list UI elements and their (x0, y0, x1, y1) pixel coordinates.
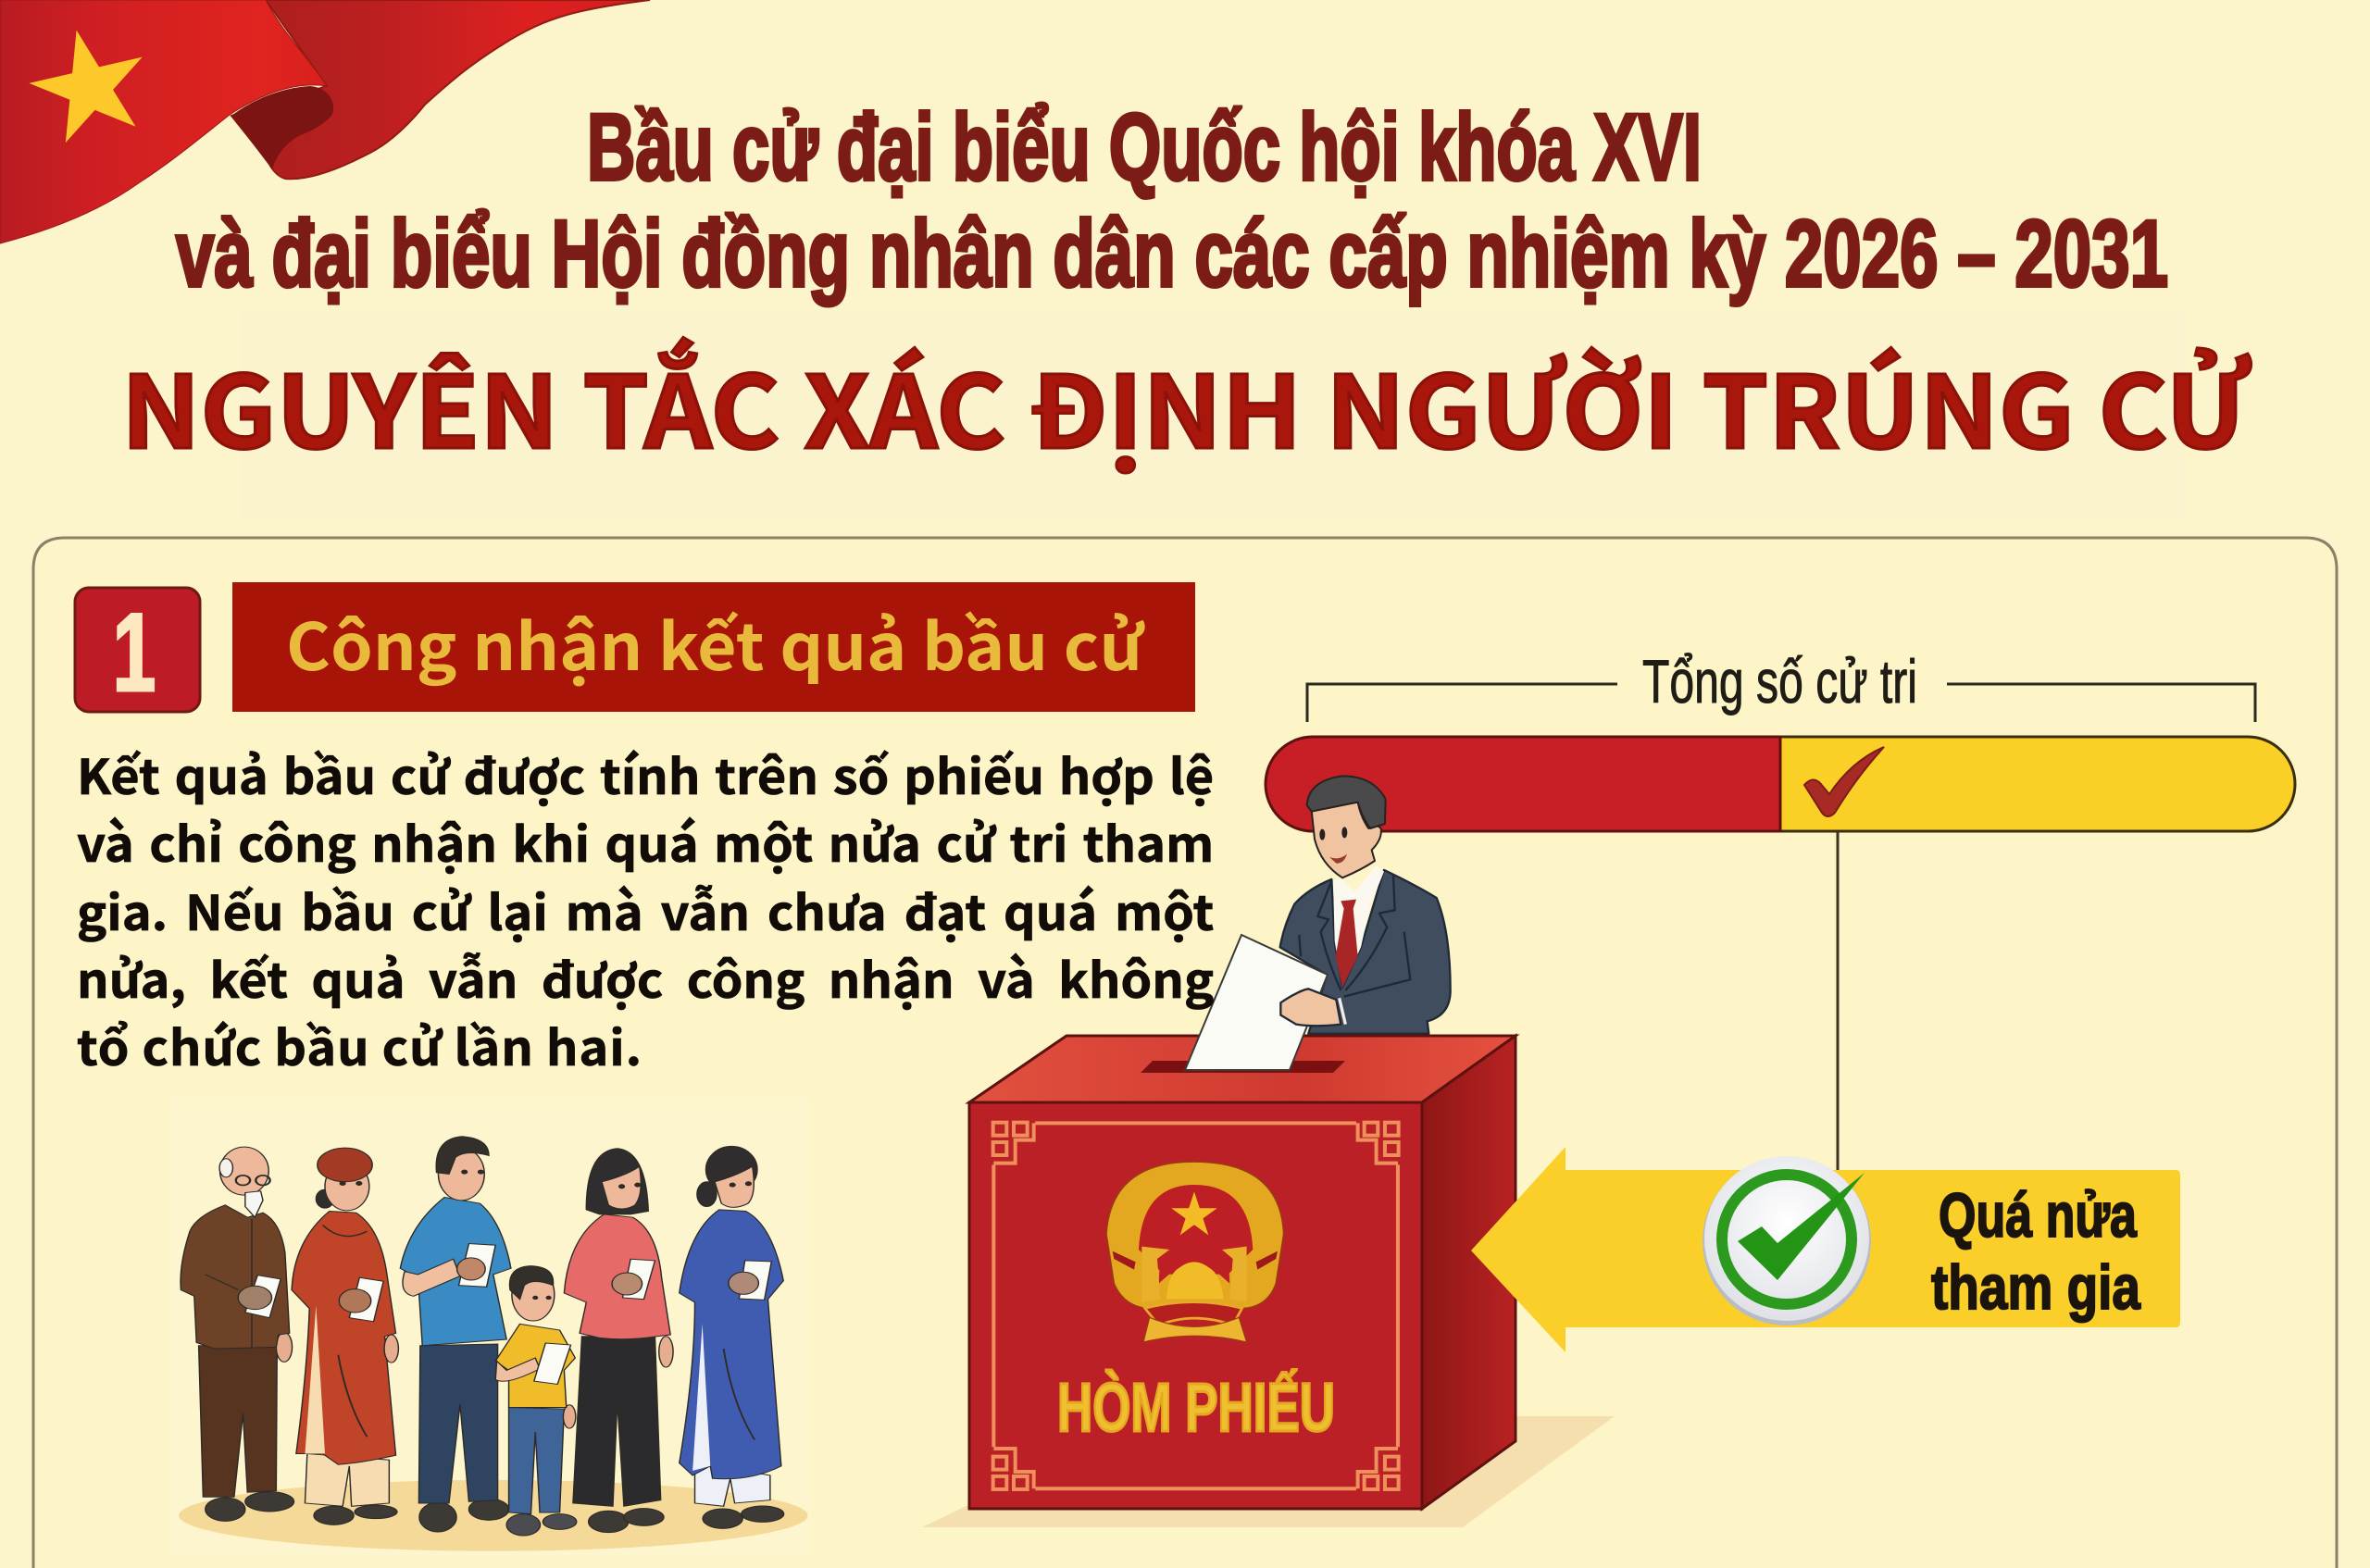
connector line (1837, 831, 1839, 1170)
title backdrop (241, 310, 2185, 523)
panel border (33, 538, 2337, 1568)
number badge: 1 (113, 590, 156, 714)
subtitle heading (176, 94, 2168, 306)
box ornamental frame (993, 1123, 1399, 1489)
elderly woman (292, 1148, 398, 1524)
voter hand (1280, 989, 1345, 1026)
ballot box (969, 935, 1516, 1509)
adult man (400, 1137, 511, 1532)
voter man (1280, 776, 1451, 1034)
child (495, 1266, 577, 1536)
ballot paper (1185, 935, 1328, 1070)
elderly man (181, 1147, 293, 1521)
body paragraph: Kết quả bầu cử được tính trên số phiếu hợp lệ (77, 739, 1214, 808)
arrow label: tham gia (1931, 1252, 2141, 1323)
bar check mark (1804, 747, 1884, 816)
woman blue (680, 1146, 784, 1528)
red flag ribbon (0, 0, 650, 243)
yellow arrow (1471, 1147, 2180, 1352)
body paragraph: nửa, kết quả vẫn được công nhận và không (77, 942, 1214, 1012)
total voters bracket (1307, 647, 2255, 722)
number badge (75, 588, 200, 714)
total voters bracket: Tổng số cử tri (1642, 647, 1917, 716)
body paragraph: gia. Nếu bầu cử lại mà vẫn chưa đạt quá một (77, 875, 1214, 944)
green check badge (1703, 1156, 1871, 1325)
body paragraph: và chỉ công nhận khi quá một nửa cử tri tham (77, 806, 1214, 876)
voters family group (169, 1099, 810, 1556)
national emblem (1106, 1162, 1284, 1342)
box slot (1141, 1061, 1345, 1073)
section header bar (232, 582, 1195, 712)
turnout progress bar (1266, 737, 2295, 831)
arrow label: Quá nửa (1939, 1180, 2138, 1251)
main title: NGUYÊN TẮC XÁC ĐỊNH NGƯỜI TRÚNG CỬ (121, 333, 2252, 478)
woman pink (564, 1149, 673, 1533)
body paragraph (77, 739, 1214, 1079)
section header bar: Công nhận kết quả bầu cử (286, 596, 1146, 690)
subtitle heading: Bầu cử đại biểu Quốc hội khóa XVI (587, 94, 1702, 200)
body paragraph: tổ chức bầu cử lần hai. (77, 1010, 642, 1079)
flag star (19, 18, 157, 148)
floor shadow (922, 1416, 1615, 1527)
box label: HÒM PHIẾU (1057, 1369, 1335, 1446)
arrow label (1931, 1180, 2141, 1323)
